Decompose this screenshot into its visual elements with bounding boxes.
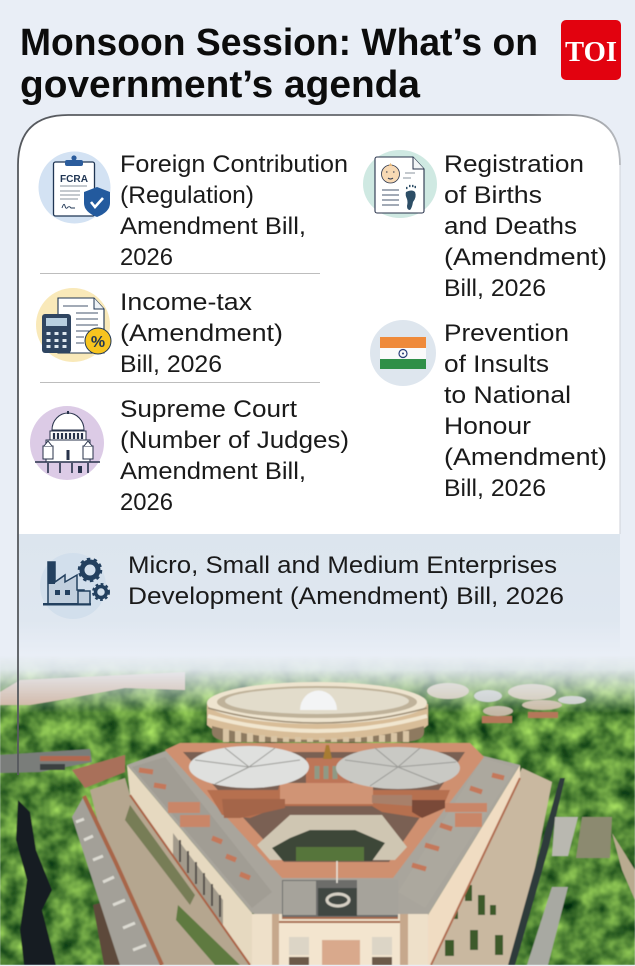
text: Registration of Births and Deaths bill: and Deaths bbox=[444, 213, 577, 240]
text: Prevention of Insults bill: to National bbox=[444, 382, 571, 409]
text: Registration of Births and Deaths bill: Bill, 2026 bbox=[444, 275, 546, 302]
text: Prevention of Insults bill: (Amendment) bbox=[444, 444, 607, 471]
roof bbox=[127, 745, 520, 922]
text: Registration of Births and Deaths bill: Registration bbox=[444, 151, 584, 178]
text: Supreme Court bill: Supreme Court bbox=[120, 396, 297, 423]
text: Prevention of Insults bill: Prevention bbox=[444, 320, 569, 347]
panel: bill list card bbox=[18, 115, 620, 534]
text: Foreign Contribution bill: Amendment Bill, bbox=[120, 213, 306, 240]
text: Foreign Contribution bill: (Regulation) bbox=[120, 182, 254, 209]
icon: FCRA clipboard with shield: FCRA bbox=[60, 174, 88, 185]
text: Foreign Contribution bill: Foreign Contribution bbox=[120, 151, 348, 178]
left forest road bbox=[16, 800, 56, 965]
icon: Supreme Court building bbox=[30, 406, 104, 480]
text: Supreme Court bill: (Number of Judges) bbox=[120, 427, 349, 454]
icon: birth and death registration document bbox=[363, 150, 437, 218]
roof blocks bbox=[168, 802, 487, 827]
text: Foreign Contribution bill: 2026 bbox=[120, 244, 173, 271]
title bbox=[20, 22, 538, 106]
old circular Parliament House bbox=[207, 682, 428, 742]
text: MSME bill: Development (Amendment) Bill, 2026 bbox=[128, 583, 564, 610]
text: Income-tax bill: Bill, 2026 bbox=[120, 351, 222, 378]
photo: new and old Parliament buildings bbox=[0, 655, 635, 965]
brick ring bbox=[165, 743, 484, 878]
text: Registration of Births and Deaths bill bbox=[444, 151, 607, 302]
text: Prevention of Insults bill: of Insults bbox=[444, 351, 549, 378]
text: Prevention of Insults bill: Honour bbox=[444, 413, 531, 440]
text: Supreme Court bill: Amendment Bill, bbox=[120, 458, 306, 485]
text: Registration of Births and Deaths bill: of Births bbox=[444, 182, 542, 209]
icon: FCRA clipboard with shield bbox=[38, 152, 110, 224]
centre chamber blocks bbox=[207, 783, 450, 818]
icon: income-tax calculator and document bbox=[36, 288, 111, 362]
fog fade at top of photo bbox=[0, 655, 635, 713]
icon: income-tax calculator and document: % bbox=[91, 334, 105, 351]
text: Income-tax bill bbox=[120, 289, 283, 378]
title: Monsoon Session: What’s on bbox=[20, 22, 538, 64]
new Parliament roof and walls bbox=[127, 743, 520, 965]
text: MSME bill bbox=[128, 552, 564, 610]
text: Income-tax bill: Income-tax bbox=[120, 289, 252, 316]
left ground strip and parking bbox=[90, 778, 250, 965]
text: Prevention of Insults bill bbox=[444, 320, 607, 502]
title: government’s agenda bbox=[20, 64, 421, 106]
front roof bbox=[282, 880, 398, 918]
text: Supreme Court bill bbox=[120, 396, 349, 516]
right ground strip and parking bbox=[430, 768, 552, 965]
logo: TOI: TOI bbox=[565, 36, 617, 68]
text: MSME bill: Micro, Small and Medium Enterprises bbox=[128, 552, 557, 579]
logo: TOI bbox=[561, 20, 621, 80]
left card border through photo bbox=[17, 534, 19, 775]
text: Income-tax bill: (Amendment) bbox=[120, 320, 283, 347]
courtyard bbox=[257, 815, 407, 860]
front block bbox=[252, 914, 428, 965]
panel: MSME bill band bbox=[19, 534, 620, 655]
icon: factory and gears bbox=[40, 553, 109, 619]
road top left bbox=[0, 749, 92, 773]
trees and ground bbox=[0, 655, 635, 965]
text: Prevention of Insults bill: Bill, 2026 bbox=[444, 475, 546, 502]
walls bbox=[127, 765, 252, 965]
petal domes bbox=[189, 746, 309, 788]
distant sandstone buildings bbox=[0, 672, 586, 723]
text: Supreme Court bill: 2026 bbox=[120, 489, 173, 516]
text: Foreign Contribution bill bbox=[120, 151, 348, 271]
text: Registration of Births and Deaths bill: (Amendment) bbox=[444, 244, 607, 271]
icon: Indian flag bbox=[370, 320, 436, 386]
